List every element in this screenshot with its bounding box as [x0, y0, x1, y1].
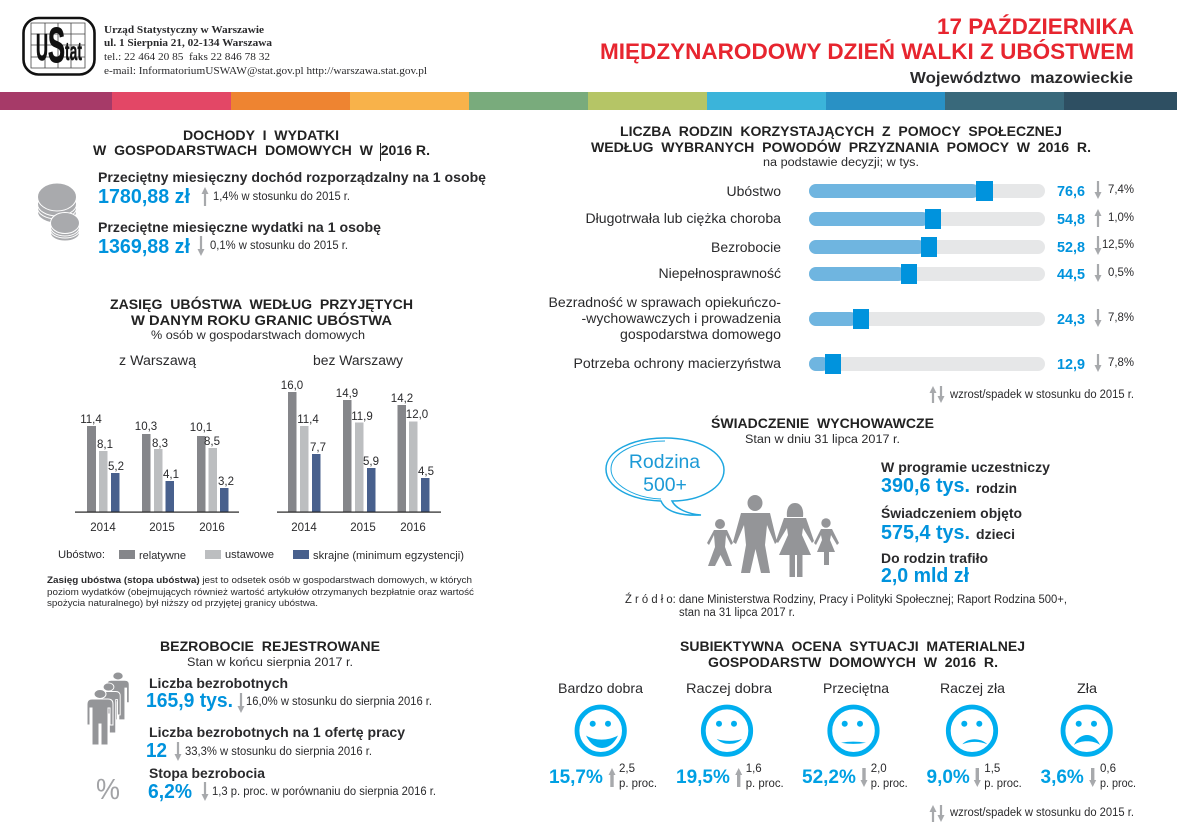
title [600, 14, 1134, 87]
heading: child benefit: Stan w dniu 31 lipca 2017 r. [745, 434, 900, 446]
text: source [625, 593, 1067, 619]
stat: average expenses: 1369,88 zł [98, 236, 190, 258]
legend: change arrows: wzrost/spadek w stosunku do 2015 r. [949, 389, 1134, 401]
chart row: disability: 44,5 [1057, 267, 1085, 283]
icon: percent: % [96, 774, 120, 806]
rating: average [802, 680, 908, 790]
rating: average: 52,2% [802, 767, 856, 788]
chart row: helplessness in childcare: 24,3 [1057, 312, 1085, 328]
bar chart: with Warsaw: 8,5 [204, 436, 220, 448]
bar chart: with Warsaw: 8,1 [97, 439, 113, 451]
stat: participating families: rodzin [976, 480, 1017, 496]
chart row: maternity protection: Potrzeba ochrony macierzyństwa [574, 355, 781, 371]
rating: bad [1040, 680, 1136, 790]
bar chart: with Warsaw: 2015 [149, 522, 175, 534]
icon: family [707, 495, 839, 577]
chart row: helplessness in childcare: gospodarstwa domowego [620, 326, 781, 342]
panel: income and expenses [38, 128, 486, 258]
bar chart: without Warsaw: 16,0 [281, 380, 303, 392]
stat: average income: 1780,88 zł [98, 186, 190, 208]
icon: unemployed people [87, 672, 129, 745]
colour strip [0, 92, 1177, 110]
text: office address: ul. 1 Sierpnia 21, 02-134 Warszawa [104, 38, 273, 49]
heading: social assistance: WEDŁUG WYBRANYCH POWODÓW PRZYZNANIA POMOCY W 2016 R. [591, 140, 1091, 155]
chart row: poverty [726, 181, 1134, 201]
chart row: long-term illness: 54,8 [1057, 212, 1085, 228]
heading: child benefit [711, 416, 934, 446]
title: 17 PAŹDZIERNIKA [937, 14, 1134, 39]
rating: very good: 2,5 [619, 763, 635, 775]
heading: registered unemployment [160, 639, 380, 669]
stat: covered children [881, 504, 1022, 544]
bar chart: without Warsaw: 2015 [350, 522, 376, 534]
bar chart: with Warsaw: 11,4 [80, 414, 102, 426]
bar chart: with Warsaw: 10,3 [135, 421, 157, 433]
heading: income and expenses: DOCHODY I WYDATKI [183, 128, 339, 143]
stat: covered children: 575,4 tys. [881, 522, 970, 544]
heading: child benefit: ŚWIADCZENIE WYCHOWAWCZE [711, 416, 934, 431]
rating: bad: 0,6 [1100, 763, 1116, 775]
stat: unemployed per job offer: Liczba bezrobotnych na 1 ofertę pracy [149, 724, 405, 740]
legend: change arrows: wzrost/spadek w stosunku do 2015 r. [949, 807, 1134, 819]
chart row: helplessness in childcare: Bezradność w sprawach opiekuńczo- [548, 294, 781, 310]
text: poverty definition [47, 575, 474, 609]
bar chart: without Warsaw: 2016 [400, 522, 426, 534]
stat: average expenses: Przeciętne miesięczne wydatki na 1 osobę [98, 219, 381, 235]
title: Województwo mazowieckie [910, 70, 1133, 87]
stat: number of unemployed [146, 675, 432, 713]
bar chart: without Warsaw: 7,7 [310, 442, 326, 454]
rating: very good: 15,7% [549, 767, 603, 788]
bar chart: with Warsaw: 10,1 [190, 422, 212, 434]
chart row: long-term illness [586, 209, 1134, 229]
rating: rather good: 19,5% [676, 767, 730, 788]
stat: number of unemployed: 16,0% w stosunku do sierpnia 2016 r. [246, 696, 432, 708]
stat: participating families: 390,6 tys. [881, 475, 970, 497]
heading: income and expenses: W GOSPODARSTWACH DOMOWYCH W 2016 R. [93, 143, 430, 158]
chart row: maternity protection: 7,8% [1108, 357, 1134, 369]
stat: money paid: Do rodzin trafiło [881, 550, 988, 566]
chart row: long-term illness: Długotrwała lub ciężka choroba [586, 210, 781, 226]
chart row: disability: Niepełnosprawność [658, 265, 781, 281]
chart row: helplessness in childcare: 7,8% [1108, 312, 1134, 324]
rating: bad: 3,6% [1040, 767, 1084, 788]
panel: subjective material situation [549, 639, 1136, 822]
bar chart: with Warsaw: 4,1 [163, 469, 179, 481]
stat: covered children: dzieci [976, 526, 1015, 542]
stat: participating families [881, 459, 1050, 497]
heading: social assistance [591, 124, 1091, 169]
stat: average income: Przeciętny miesięczny dochód rozporządzalny na 1 osobę [98, 169, 486, 185]
bar chart: without Warsaw: 2014 [291, 522, 317, 534]
stat: average expenses: 0,1% w stosunku do 2015 r. [210, 240, 348, 252]
stat: number of unemployed: Liczba bezrobotnych [149, 675, 288, 691]
heading: social assistance: LICZBA RODZIN KORZYSTAJĄCYCH Z POMOCY SPOŁECZNEJ [620, 124, 1062, 139]
callout: Rodzina 500+ [606, 438, 724, 515]
stat: average income [98, 169, 486, 208]
bar chart: with Warsaw: 3,2 [218, 476, 234, 488]
text: poverty definition: spożycia naturalnego) był niższy od przyjętej granicy ubóstwa. [47, 598, 318, 609]
title: MIĘDZYNARODOWY DZIEŃ WALKI Z UBÓSTWEM [600, 39, 1134, 64]
stat: unemployed per job offer [146, 724, 405, 762]
bar chart: without Warsaw: bez Warszawy [313, 353, 403, 368]
chart row: unemployment: 12,5% [1102, 239, 1134, 251]
icon: UStat logo [24, 18, 94, 74]
rating: bad: Zła [1077, 680, 1097, 696]
heading: subjective assessment: GOSPODARSTW DOMOWYCH W 2016 R. [708, 655, 998, 670]
bar chart: without Warsaw: 11,4 [297, 414, 319, 426]
chart row: helplessness in childcare: -wychowawczych i prowadzenia [582, 310, 781, 326]
rating: rather good [676, 680, 784, 790]
stat: unemployment rate: 6,2% [148, 781, 192, 803]
heading: social assistance: na podstawie decyzji; w tys. [763, 157, 919, 169]
chart row: helplessness in childcare [548, 294, 1134, 342]
panel: registered unemployment [87, 639, 436, 806]
text: poverty definition: Zasięg ubóstwa (stopa ubóstwa) jest to odsetek osób w gospodarstwach domowych, w których [47, 575, 472, 586]
heading: poverty range: ZASIĘG UBÓSTWA WEDŁUG PRZYJĘTYCH [110, 297, 413, 312]
text: source: Ź r ó d ł o: dane Ministerstwa Rodziny, Pracy i Polityki Społecznej; Raport Rodzina 500+, [625, 593, 1067, 606]
chart row: poverty: 7,4% [1108, 184, 1134, 196]
stat: unemployment rate [148, 765, 436, 803]
bar chart: without Warsaw: 12,0 [406, 409, 428, 421]
rating: rather bad: Raczej zła [940, 680, 1005, 696]
chart row: disability: 0,5% [1108, 267, 1134, 279]
panel: child benefit [606, 416, 1067, 619]
rating: rather bad: p. proc. [984, 778, 1022, 790]
text: office address: e-mail: InformatoriumUSWAW@stat.gov.pl http://warszawa.stat.gov.pl [104, 65, 427, 77]
rating: bad: p. proc. [1100, 778, 1136, 790]
rating: rather good: Raczej dobra [686, 680, 772, 696]
rating: very good [549, 680, 657, 790]
rating: very good: p. proc. [619, 778, 657, 790]
bar chart: with Warsaw [75, 353, 239, 534]
panel: families receiving social assistance [548, 124, 1134, 403]
legend: change arrows [929, 386, 1134, 403]
rating: rather bad [926, 680, 1022, 790]
heading: poverty range [110, 297, 413, 342]
chart row: maternity protection: 12,9 [1057, 357, 1085, 373]
legend: change arrows [929, 805, 1134, 822]
icon: UStat logo: S [48, 19, 65, 73]
text: poverty definition: poziom wydatków (obejmujących również wartość artykułów otrzymanych bezpłatnie oraz wartość [47, 587, 474, 598]
heading: poverty range: % osób w gospodarstwach domowych [151, 330, 365, 342]
chart row: unemployment: 52,8 [1057, 240, 1085, 256]
legend: poverty types: Ubóstwo: [58, 549, 105, 561]
stat: unemployed per job offer: 33,3% w stosunku do sierpnia 2016 r. [185, 746, 372, 758]
bar chart: without Warsaw: 14,2 [391, 393, 413, 405]
stat: participating families: W programie uczestniczy [881, 459, 1050, 475]
heading: income and expenses [93, 128, 430, 161]
bar chart: with Warsaw: 2016 [199, 522, 225, 534]
bar chart: without Warsaw: 5,9 [363, 456, 379, 468]
heading: registered unemployment: Stan w końcu sierpnia 2017 r. [187, 657, 353, 669]
rating: rather good: p. proc. [746, 778, 784, 790]
callout: Rodzina 500+: Rodzina [629, 451, 700, 473]
icon: UStat logo: tat [65, 36, 82, 66]
legend: poverty types: relatywne [139, 550, 186, 562]
bar chart: with Warsaw: 2014 [90, 522, 116, 534]
stat: unemployment rate: 1,3 p. proc. w porównaniu do sierpnia 2016 r. [212, 786, 436, 798]
bar chart: with Warsaw: 5,2 [108, 461, 124, 473]
rating: average: p. proc. [871, 778, 908, 790]
stat: unemployment rate: Stopa bezrobocia [149, 765, 265, 781]
text: office address: tel.: 22 464 20 85 faks 22 846 78 32 [104, 51, 270, 63]
heading: subjective assessment [680, 639, 1025, 670]
text: office address [104, 25, 427, 77]
stat: covered children: Świadczeniem objęto [881, 504, 1022, 521]
heading: registered unemployment: BEZROBOCIE REJESTROWANE [160, 639, 380, 654]
chart row: poverty: Ubóstwo [726, 183, 781, 199]
stat: average income: 1,4% w stosunku do 2015 r. [213, 191, 350, 203]
bar chart: without Warsaw: 14,9 [336, 388, 358, 400]
chart row: long-term illness: 1,0% [1108, 212, 1134, 224]
chart row: poverty: 76,6 [1057, 184, 1085, 200]
bar chart: without Warsaw [277, 353, 441, 534]
chart row: unemployment [711, 236, 1134, 257]
bar chart: without Warsaw: 11,9 [351, 411, 373, 423]
stat: unemployed per job offer: 12 [146, 740, 167, 762]
text: office address: Urząd Statystyczny w Warszawie [104, 25, 264, 36]
icon: UStat logo: U [36, 27, 48, 68]
heading: poverty range: W DANYM ROKU GRANIC UBÓSTWA [131, 313, 392, 328]
legend: poverty types [58, 549, 464, 562]
rating: rather bad: 1,5 [984, 763, 1000, 775]
chart row: unemployment: Bezrobocie [711, 239, 781, 255]
text: source: stan na 31 lipca 2017 r. [679, 607, 795, 619]
header: statistical office [24, 18, 427, 77]
rating: very good: Bardzo dobra [558, 680, 643, 696]
stat: average expenses [98, 219, 381, 258]
rating: rather good: 1,6 [746, 763, 762, 775]
legend: poverty types: skrajne (minimum egzystencji) [313, 550, 464, 562]
chart row: maternity protection [574, 354, 1134, 374]
legend: poverty types: ustawowe [225, 549, 274, 561]
rating: rather bad: 9,0% [926, 767, 970, 788]
bar chart: with Warsaw: 8,3 [152, 438, 168, 450]
stat: number of unemployed: 165,9 tys. [146, 690, 233, 712]
bar chart: with Warsaw: z Warszawą [119, 353, 197, 368]
stat: money paid [881, 550, 988, 587]
chart row: disability [658, 264, 1134, 284]
rating: average: 2,0 [871, 763, 887, 775]
heading: subjective assessment: SUBIEKTYWNA OCENA SYTUACJI MATERIALNEJ [680, 639, 1025, 654]
callout: Rodzina 500+: 500+ [643, 474, 687, 496]
bar chart: without Warsaw: 4,5 [418, 466, 434, 478]
stat: money paid: 2,0 mld zł [881, 565, 969, 587]
panel: poverty range [47, 297, 474, 609]
icon: coins [38, 183, 80, 241]
rating: average: Przeciętna [823, 680, 889, 696]
